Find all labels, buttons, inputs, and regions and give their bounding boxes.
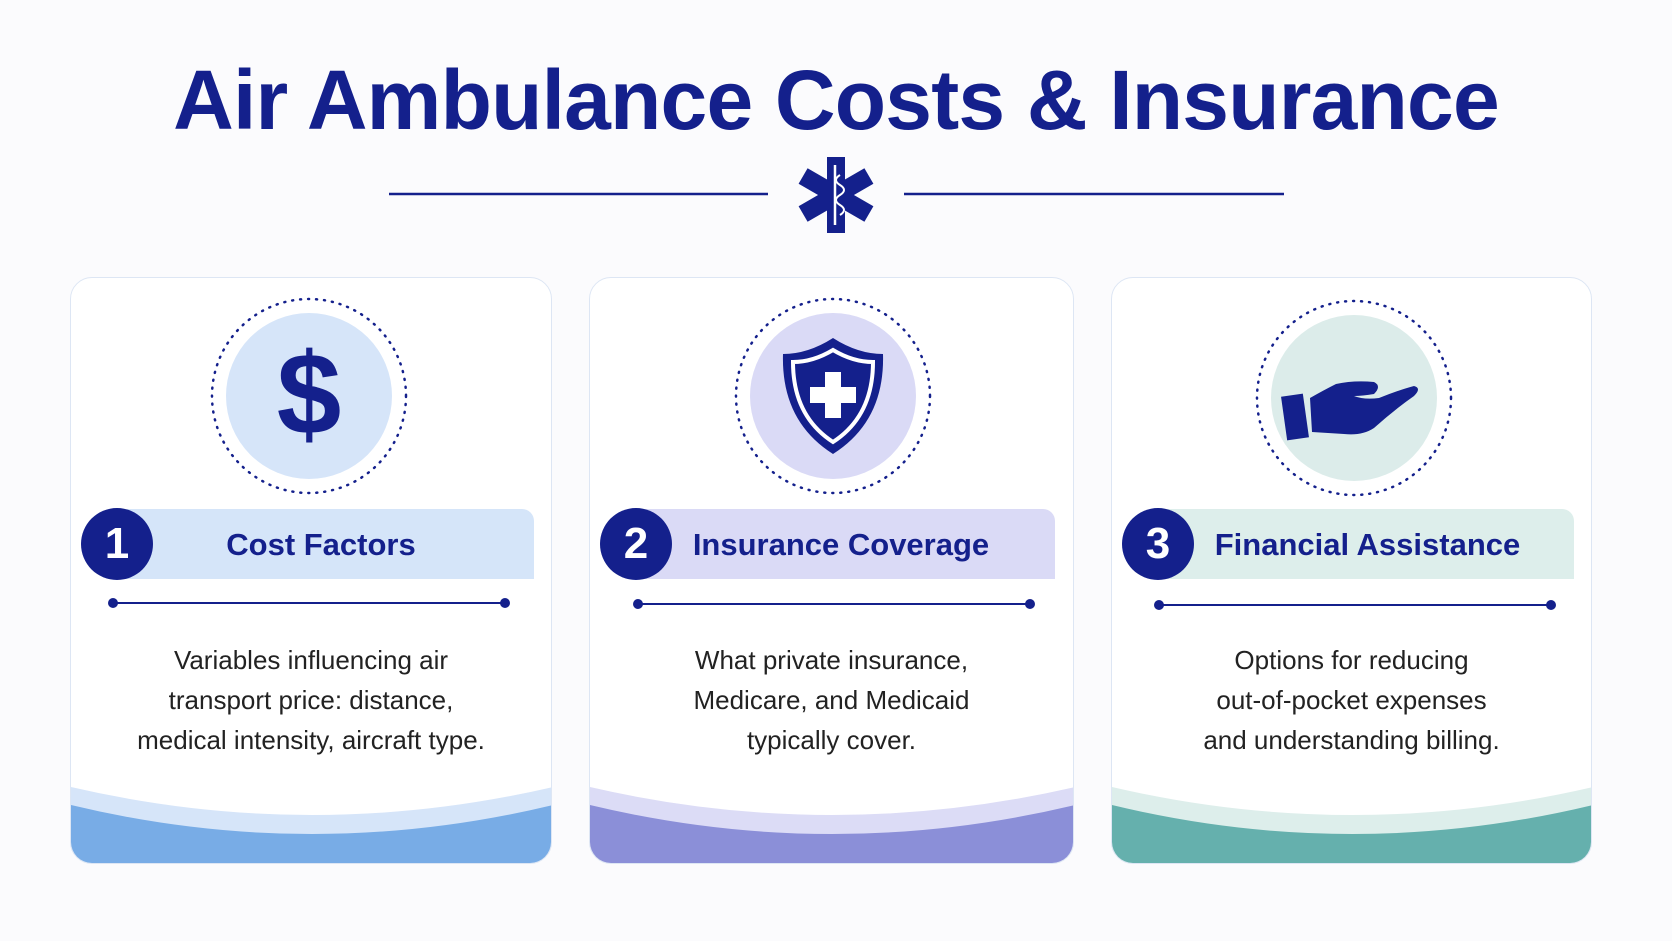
divider xyxy=(633,599,1035,609)
icon: hand xyxy=(1256,300,1452,496)
panel: financial assistance xyxy=(1111,277,1592,864)
body text: Options for reducing xyxy=(1234,645,1469,675)
bottom wave xyxy=(590,787,1073,863)
panel: insurance coverage xyxy=(589,277,1074,864)
body text: transport price: distance, xyxy=(169,685,453,715)
bottom wave xyxy=(71,787,551,863)
icon: dollar: $ xyxy=(277,329,341,459)
number badge 2 xyxy=(600,508,672,580)
body text: Variables influencing air xyxy=(174,645,448,675)
body text: What private insurance, xyxy=(695,645,968,675)
header band xyxy=(1149,509,1574,579)
panel: cost factors xyxy=(70,277,552,864)
body text: medical intensity, aircraft type. xyxy=(137,725,485,755)
header band xyxy=(627,509,1055,579)
body text xyxy=(137,645,485,755)
number badge 1 xyxy=(81,508,153,580)
icon: dollar xyxy=(210,298,408,494)
header band: Financial Assistance xyxy=(1215,527,1520,562)
body text: and understanding billing. xyxy=(1203,725,1500,755)
header band: Insurance Coverage xyxy=(693,527,989,562)
bottom wave xyxy=(1112,787,1591,863)
number badge 1: 1 xyxy=(105,519,129,568)
divider xyxy=(108,598,510,608)
body text: typically cover. xyxy=(747,725,916,755)
divider xyxy=(1154,600,1556,610)
title divider with star of life xyxy=(389,157,1284,233)
body text: out-of-pocket expenses xyxy=(1216,685,1487,715)
number badge 2: 2 xyxy=(624,519,648,568)
icon: shield xyxy=(734,298,932,494)
body text: Medicare, and Medicaid xyxy=(693,685,970,715)
header band xyxy=(108,509,534,579)
number badge 3: 3 xyxy=(1146,519,1170,568)
number badge 3 xyxy=(1122,508,1194,580)
title: Air Ambulance Costs & Insurance xyxy=(173,53,1499,147)
header band: Cost Factors xyxy=(226,527,416,562)
body text xyxy=(693,645,970,755)
body text xyxy=(1203,645,1500,755)
